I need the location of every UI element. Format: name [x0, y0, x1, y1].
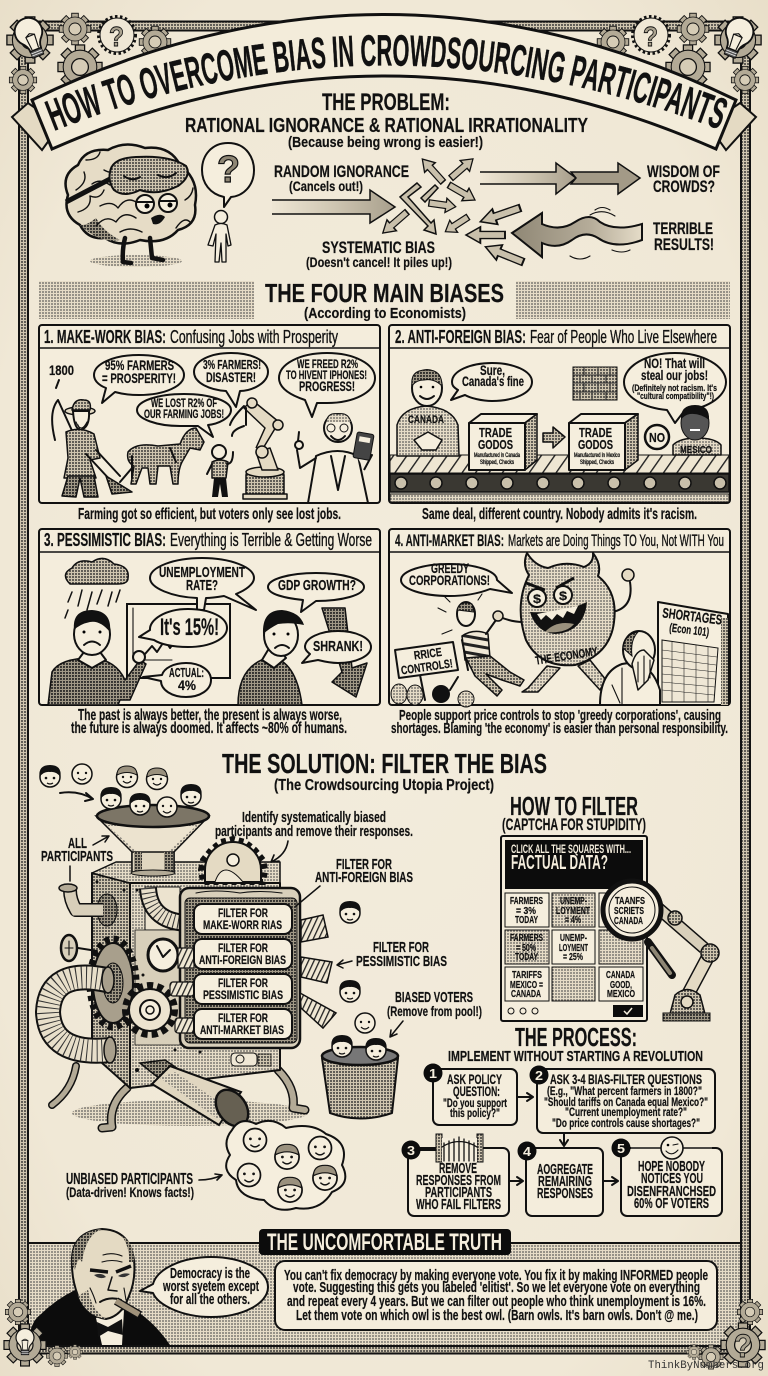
speech bubble: No, that will steal our jobs: "cultural compatibility"!)	[637, 391, 714, 401]
label: filter for anti-foreign bias	[296, 856, 413, 906]
filter: anti-market	[194, 1009, 292, 1039]
icon: question mark cog: ?	[643, 21, 658, 52]
step 2: (E.g., "What percent farmers in 1800?"	[547, 1084, 702, 1098]
icon: shortages chart: SHORTAGES	[661, 604, 723, 628]
speech bubble: we freed: TO HIVENT IPHONES!	[286, 368, 367, 382]
caption: panel 1: Farming got so efficient, but voters only see lost jobs.	[78, 506, 341, 523]
speech bubble: unemployment rate: RATE?	[186, 577, 218, 594]
step 1: this policy?"	[450, 1108, 500, 1120]
icon: economy monster: $	[533, 592, 541, 606]
panel heading: 3. PESSIMISTIC BIAS:	[44, 530, 166, 550]
icon: price controls sign	[395, 642, 458, 700]
icon: sleeping brain with eye mask	[66, 144, 196, 267]
captcha cells: TODAY	[515, 952, 538, 963]
speech bubble: No, that will steal our jobs: (Definitely not racism. It's	[632, 383, 717, 393]
caption: panel 3: The past is always better, the present is always worse,	[78, 707, 342, 724]
icon: trade goods box 1: GODOS	[478, 438, 513, 452]
captcha cells: = 25%	[563, 952, 583, 963]
filter: make-work	[194, 904, 292, 934]
heading: the process	[448, 1022, 703, 1065]
speech bubble: unemployment rate	[150, 558, 256, 610]
bottom output pipe	[140, 1060, 255, 1132]
icon: Mexican man: MESICO	[680, 445, 712, 456]
icon: Canadian man: CANADA	[408, 414, 444, 426]
speech bubble: Churchill quote: for all the others.	[170, 1292, 250, 1308]
step 3: PARTICIPANTS	[425, 1185, 492, 1201]
label: unbiased participants	[66, 1171, 222, 1200]
speech bubble: Churchill quote: worst syetem except	[162, 1279, 259, 1295]
captcha cells: UNEMP-	[560, 933, 587, 944]
icon: sad man	[238, 610, 304, 705]
arrow: step 3 to 4	[510, 1177, 523, 1185]
filter: make-work: MAKE-WORR RIAS	[203, 918, 282, 932]
speech bubble: 95 percent farmers: 95% FARMERS	[105, 357, 174, 373]
filter: pessimistic	[194, 974, 292, 1004]
icon: shortages chart: (Econ 101)	[669, 621, 710, 639]
icon: Churchill portrait	[28, 1229, 170, 1345]
label: terrible results	[653, 219, 714, 254]
icon: trade goods box 1: Manufactured in Canada	[474, 453, 520, 459]
magnified text: CANADA	[614, 916, 643, 927]
footer credit: ThinkByNumbers.org	[648, 1360, 764, 1372]
speech bubble: 3 percent farmers	[194, 353, 268, 407]
heading: the problem: (Because being wrong is easier!)	[288, 134, 483, 151]
captcha cells: = 50%	[516, 943, 536, 954]
panel heading	[395, 531, 724, 550]
heading pill	[259, 1229, 511, 1256]
label: wisdom of crowds: CROWDS?	[653, 177, 715, 196]
step 3: WHO FAIL FILTERS	[416, 1197, 501, 1213]
label: random ignorance: RANDOM IGNORANCE	[274, 162, 409, 181]
icon: light bulb	[16, 1329, 34, 1355]
corner ornament: top right gears, bulb and question mark	[597, 13, 761, 94]
step 1: "Do you support	[443, 1098, 507, 1110]
panel heading	[395, 327, 717, 347]
icon: no sign	[645, 425, 669, 449]
panel: 2 anti-foreign bias	[389, 325, 730, 503]
icon: economy monster	[500, 553, 634, 692]
speech bubble: we freed	[279, 353, 375, 417]
captcha cells: MEXICO =	[510, 980, 543, 991]
step 4: 4	[523, 1144, 532, 1159]
funnel with participants	[96, 784, 209, 876]
speech bubble: actual 4 percent: ACTUAL:	[169, 666, 204, 680]
speech bubble: greedy corporations: CORPORATIONS!	[409, 573, 490, 588]
icon: down arrow	[322, 608, 367, 697]
label: terrible results: RESULTS!	[654, 235, 714, 254]
step 4: RESPONSES	[537, 1186, 593, 1202]
label: wisdom of crowds: WISDOM OF	[647, 162, 720, 181]
icon: price controls sign: RRICE	[413, 645, 443, 663]
captcha cells: CANADA	[606, 970, 635, 981]
icon: brick wall	[573, 367, 617, 400]
caption: panel 4	[391, 707, 728, 737]
label: filter for pessimistic bias	[337, 939, 447, 970]
filter: anti-foreign	[194, 939, 292, 969]
label: random ignorance: (Cancels out!)	[289, 179, 363, 194]
panel heading: 4. ANTI-MARKET BIAS:	[395, 531, 504, 550]
arrow: step 2 down	[560, 1134, 568, 1146]
icon: line chart board	[127, 604, 230, 678]
icon: man with head in hands	[600, 631, 660, 705]
icon: light bulb	[10, 14, 51, 61]
icon: economy monster: $	[559, 589, 567, 603]
icon: horse	[128, 428, 204, 484]
step 2: 2	[535, 1068, 543, 1083]
filter: pessimistic: FILTER FOR	[218, 976, 268, 990]
exit pipes with biased heads	[300, 901, 375, 1033]
panel heading: 2. ANTI-FOREIGN BIAS:	[395, 327, 526, 347]
step 5: NOTICES YOU	[641, 1171, 703, 1187]
caption: panel 3	[71, 707, 347, 737]
filter: make-work: FILTER FOR	[218, 906, 268, 920]
icon: trade goods box 1	[469, 414, 537, 470]
label: systematic bias	[306, 238, 452, 270]
speech bubble: actual 4 percent	[143, 663, 211, 697]
icon: economy monster: THE ECONOMY	[534, 644, 599, 668]
captcha panel	[501, 836, 647, 1021]
label: terrible results: TERRIBLE	[653, 219, 713, 238]
filter panel	[180, 888, 300, 1048]
step 1: ASK POLICY	[447, 1071, 502, 1087]
icon: price controls sign: CONTROLS!	[400, 656, 454, 677]
magnified text: SCRIETS	[614, 906, 644, 917]
caption: panel 3: the future is always doomed. It affects ~80% of humans.	[71, 720, 347, 737]
icon: protesters	[391, 677, 474, 707]
captcha cells: CANADA	[511, 989, 541, 1000]
filter: anti-market: ANTI-MARKET BIAS	[200, 1023, 284, 1037]
speech bubble: 95 percent farmers: = PROSPERITY!	[102, 370, 176, 386]
panel: the uncomfortable truth	[28, 1229, 741, 1346]
icon: trade goods box 2: Shipped, Checks	[580, 460, 614, 466]
arrow: random ignorance incoming	[272, 190, 395, 223]
step 4	[518, 1142, 603, 1216]
text block: conclusion	[275, 1261, 717, 1330]
icon: waiting participants heads	[39, 764, 168, 801]
captcha cells: LOYMENT	[556, 906, 590, 917]
panel: 1 make-work bias	[39, 325, 380, 503]
panel heading: Confusing Jobs with Prosperity	[170, 327, 338, 347]
speech bubble: we lost: WE LOST R2% OF	[151, 398, 217, 410]
label: identify biased participants: participants and remove their responses.	[215, 823, 413, 840]
captcha cells: LOYMENT	[559, 943, 588, 954]
step 1	[424, 1064, 517, 1125]
corner ornament: top left gears, bulb and question mark	[7, 13, 171, 94]
step 5: DISENFRANCHSED	[627, 1184, 716, 1200]
speech bubble: unemployment rate: UNEMPLOYMENT	[159, 564, 245, 581]
captcha cells: MEXICO	[607, 989, 635, 1000]
captcha cells: TARIFFS	[512, 970, 542, 981]
step 5	[612, 1137, 722, 1216]
label: filter for anti-foreign bias: FILTER FOR	[336, 856, 392, 873]
speech bubble: Sure, Canada's fine: Canada's fine	[462, 373, 524, 389]
icon: winking smile	[631, 1137, 712, 1159]
tall side gear	[90, 939, 136, 1027]
heading: how to filter	[502, 791, 646, 834]
top gear	[201, 839, 265, 882]
step 2: "Current unemployment rate?"	[565, 1105, 687, 1119]
gauge clock	[148, 939, 178, 971]
captcha cells: GOOD,	[610, 980, 632, 991]
icon: trade goods box 1: Shipped, Checks	[480, 460, 514, 466]
speech bubble: it's 15 percent: It's 15%!	[160, 614, 219, 641]
icon: grabbed man in striped shirt	[438, 594, 524, 696]
captcha cells: FARMERS	[510, 933, 543, 944]
speech bubble: No, that will steal our jobs: steal our jobs!	[641, 367, 708, 383]
big ribbed hose	[48, 967, 116, 1063]
arrow: to wisdom of crowds	[480, 163, 640, 194]
speech bubble: we freed: PROGRESS!	[299, 379, 355, 394]
step 5: 60% OF VOTERS	[634, 1196, 709, 1212]
speech bubble: Sure, Canada's fine	[451, 362, 532, 401]
icon: Canadian man	[397, 370, 459, 456]
inner ribbed hose	[148, 888, 193, 923]
speech bubble: we lost	[137, 394, 231, 437]
label: filter for pessimistic bias: PESSIMISTIC BIAS	[356, 953, 447, 970]
label: all participants: ALL	[68, 835, 87, 852]
panel heading	[44, 530, 372, 550]
icon: trade goods box 1: TRADE	[479, 426, 512, 440]
icon: Mexican man	[673, 405, 721, 456]
label: identify biased participants: Identify systematically biased	[242, 809, 386, 826]
speech bubble: 3 percent farmers: 3% FARMERS!	[203, 357, 261, 372]
corner ornament: bottom right gears and question mark: ?	[734, 1328, 752, 1364]
speech bubble: we lost: OUR FARMING JOBS!	[144, 409, 224, 421]
step 5: HOPE NOBODY	[638, 1159, 705, 1175]
captcha cells: FARMERS	[510, 896, 543, 907]
captcha cells: = 3%	[516, 906, 536, 917]
heading: the four main biases: THE FOUR MAIN BIASES	[265, 278, 504, 308]
speech bubble: Sure, Canada's fine: Sure,	[480, 362, 505, 378]
label: systematic bias: SYSTEMATIC BIAS	[322, 238, 435, 257]
magnified text: TAANFS	[615, 896, 645, 907]
icon: robot arm	[230, 398, 287, 499]
label: 1800: 1800	[49, 362, 74, 378]
icon: light bulb	[717, 14, 758, 61]
panel: 3 pessimistic bias	[39, 529, 380, 705]
icon: farmer with scythe	[52, 380, 100, 497]
speech bubble: 95 percent farmers	[94, 355, 184, 403]
front gear	[126, 986, 174, 1034]
icon: question mark cog	[98, 16, 136, 54]
step 3: RESPONSES FROM	[416, 1173, 501, 1189]
icon: rain cloud	[65, 558, 128, 618]
label: all participants: PARTICIPANTS	[41, 848, 113, 865]
icon: shortages chart	[658, 602, 728, 705]
speech bubble: actual 4 percent: 4%	[178, 678, 196, 693]
heading: the four main biases: (According to Economists)	[304, 305, 466, 322]
icon: trade goods box 2: GODOS	[578, 438, 613, 452]
heading: the problem: THE PROBLEM:	[322, 89, 450, 116]
corner ornament: bottom right gears and question mark	[687, 1299, 765, 1369]
heading: the problem	[185, 89, 589, 151]
step 4: AOGREGATE	[537, 1162, 593, 1178]
corner ornament: bottom left gears and bulb	[4, 1299, 82, 1366]
magnified text	[614, 896, 645, 927]
heading: the solution: THE SOLUTION: FILTER THE BIAS	[222, 748, 547, 779]
speech bubble: shrank	[302, 631, 371, 663]
label: biased voters	[387, 989, 482, 1037]
icon: question mark cog: ?	[109, 21, 124, 52]
captcha cells: = 4%	[565, 915, 581, 926]
speech bubble: GDP growth: GDP GROWTH?	[278, 578, 356, 594]
heading: the solution	[222, 748, 547, 794]
heading: the problem: RATIONAL IGNORANCE & RATIONAL IRRATIONALITY	[185, 115, 589, 137]
icon: plough	[86, 450, 132, 494]
speech bubble: 3 percent farmers: DISASTER!	[206, 369, 256, 385]
speech bubble: we freed: WE FREED R2%	[297, 357, 358, 371]
arrow: between boxes	[543, 427, 565, 448]
arrows: scattering small arrows	[378, 153, 526, 270]
heading pill: THE UNCOMFORTABLE TRUTH	[267, 1229, 502, 1256]
icon: question mark cog	[632, 16, 670, 54]
speech bubble: No, that will steal our jobs	[624, 353, 726, 423]
step 1: QUESTION:	[453, 1083, 500, 1099]
icon: filter machine	[48, 784, 375, 1132]
speech bubble: greedy corporations: GREEDY	[431, 561, 469, 576]
label: filter for anti-foreign bias: ANTI-FOREIGN BIAS	[315, 869, 413, 886]
icon: cloud of unbiased participants	[226, 1121, 345, 1210]
arrow: step 1 to 2	[518, 1093, 533, 1101]
icon: robot arm with magnifying glass	[603, 881, 719, 1021]
captcha header: FACTUAL DATA?	[511, 852, 608, 874]
filter: anti-foreign: ANTI-FOREIGN BIAS	[199, 953, 286, 967]
captcha controls	[508, 1005, 643, 1017]
heading: the process: THE PROCESS:	[515, 1022, 637, 1052]
captcha cells	[505, 893, 643, 1001]
heading: the four main biases	[39, 278, 730, 322]
speech bubble: Churchill quote	[140, 1257, 268, 1317]
heading: how to filter: HOW TO FILTER	[510, 791, 638, 821]
panel heading: 1. MAKE-WORK BIAS:	[44, 327, 166, 347]
captcha header: CLICK ALL THE SQUARES WITH...	[511, 844, 631, 856]
icon: gate	[436, 1134, 483, 1162]
icon: trade goods box 2	[569, 414, 638, 470]
label: random ignorance	[274, 162, 409, 194]
arrow: wavy arrow to terrible results	[512, 208, 642, 259]
panel heading: Everything is Terrible & Getting Worse	[170, 530, 372, 550]
icon: confused stick figure with question bubble: ?	[217, 149, 240, 191]
heading: the solution: (The Crowdsourcing Utopia Project)	[274, 777, 494, 794]
step 4: REMAIRING	[538, 1174, 592, 1190]
filter: pessimistic: PESSIMISTIC BIAS	[203, 988, 283, 1002]
step 3: 3	[407, 1143, 415, 1158]
machine legs	[52, 1066, 305, 1128]
icon: small worried worker	[207, 445, 233, 497]
valve	[61, 935, 97, 961]
label: biased voters: BIASED VOTERS	[395, 989, 473, 1006]
icon: economist in lab coat	[295, 414, 374, 503]
speech bubble: it's 15 percent	[139, 609, 227, 647]
step 2	[530, 1066, 715, 1133]
panel heading	[44, 327, 338, 347]
icon: confused stick figure with question bubble	[202, 143, 254, 262]
icon: no sign: NO	[649, 430, 665, 445]
label: unbiased participants: UNBIASED PARTICIPANTS	[66, 1171, 193, 1188]
icon: trade goods box 2: Manufactured in Mexico	[574, 453, 620, 459]
speech bubble: No, that will steal our jobs: NO! That will	[644, 355, 705, 371]
icon: pessimistic man pointing	[48, 610, 146, 705]
icon: conveyor belt	[390, 455, 729, 502]
label: all participants	[41, 835, 113, 881]
captcha cells: UNEMP-	[560, 896, 587, 907]
label: unbiased participants: (Data-driven! Knows facts!)	[66, 1184, 194, 1200]
captcha cells: TODAY	[515, 915, 538, 926]
captcha header	[505, 840, 643, 889]
control plate	[231, 1053, 271, 1066]
step 1: 1	[429, 1066, 437, 1081]
speech bubble: GDP growth	[268, 573, 364, 612]
title: HOW TO OVERCOME BIAS IN CROWDSOURCING PARTICIPANTS	[44, 34, 728, 131]
speech bubble: Churchill quote: Democracy is the	[170, 1266, 250, 1282]
step 3	[402, 1134, 509, 1216]
label: biased voters: (Remove from pool!)	[387, 1003, 482, 1019]
panel: 4 anti-market bias	[389, 529, 730, 707]
label: filter for pessimistic bias: FILTER FOR	[373, 939, 429, 956]
filter: anti-market: FILTER FOR	[218, 1011, 268, 1025]
label: identify biased participants	[215, 809, 413, 862]
title banner	[10, 13, 758, 152]
icon: bucket of biased voters	[322, 1035, 398, 1118]
arrow: step 4 to 5	[604, 1177, 618, 1185]
speech bubble: greedy corporations	[401, 561, 512, 596]
machine body	[92, 862, 280, 1088]
label: systematic bias: (Doesn't cancel! It piles up!)	[306, 254, 452, 270]
step 3: REMOVE	[439, 1161, 477, 1177]
connector stubs	[170, 948, 194, 1033]
label: wisdom of crowds	[647, 162, 720, 196]
heading: how to filter: (CAPTCHA FOR STUPIDITY)	[502, 816, 646, 834]
step 5: 5	[617, 1141, 625, 1156]
step 2: "Do price controls cause shortages?"	[552, 1116, 700, 1130]
filter: anti-foreign: FILTER FOR	[218, 941, 268, 955]
speech bubble: shrank: SHRANK!	[313, 639, 363, 655]
side pipe with flange	[59, 884, 117, 926]
icon: trade goods box 2: TRADE	[579, 426, 612, 440]
